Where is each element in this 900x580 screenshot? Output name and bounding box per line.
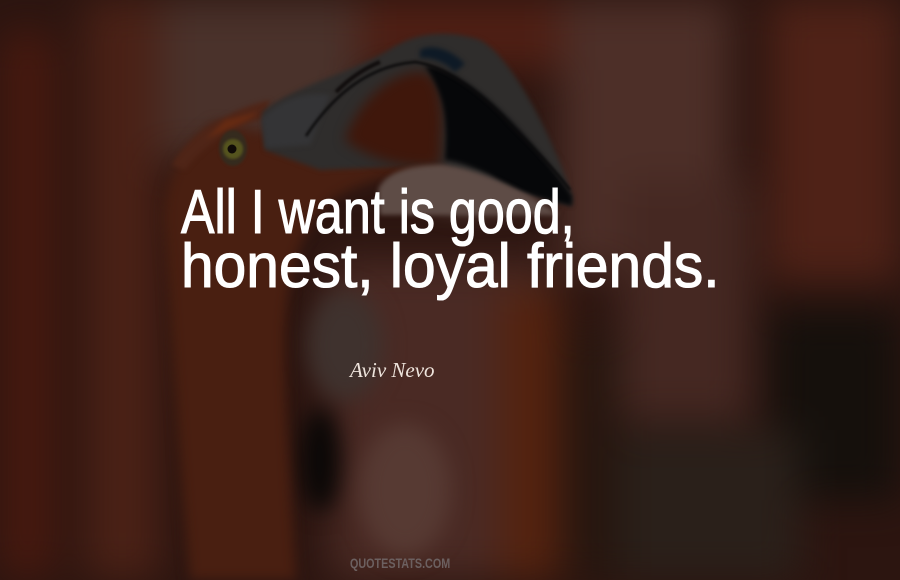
author signature: Aviv Nevo [350, 358, 435, 382]
white feather patch under beak [378, 165, 560, 215]
flamingo beak [262, 34, 572, 206]
soft pale patch [359, 424, 451, 556]
dark patch [300, 408, 340, 512]
source credit: QUOTESTATS.COM [350, 555, 450, 571]
quote heading [180, 178, 720, 301]
quote heading: honest, loyal friends. [181, 232, 720, 301]
quote heading: All I want is good, [181, 178, 575, 247]
flamingo neck and head [164, 122, 440, 580]
flamingo eye [219, 130, 247, 166]
